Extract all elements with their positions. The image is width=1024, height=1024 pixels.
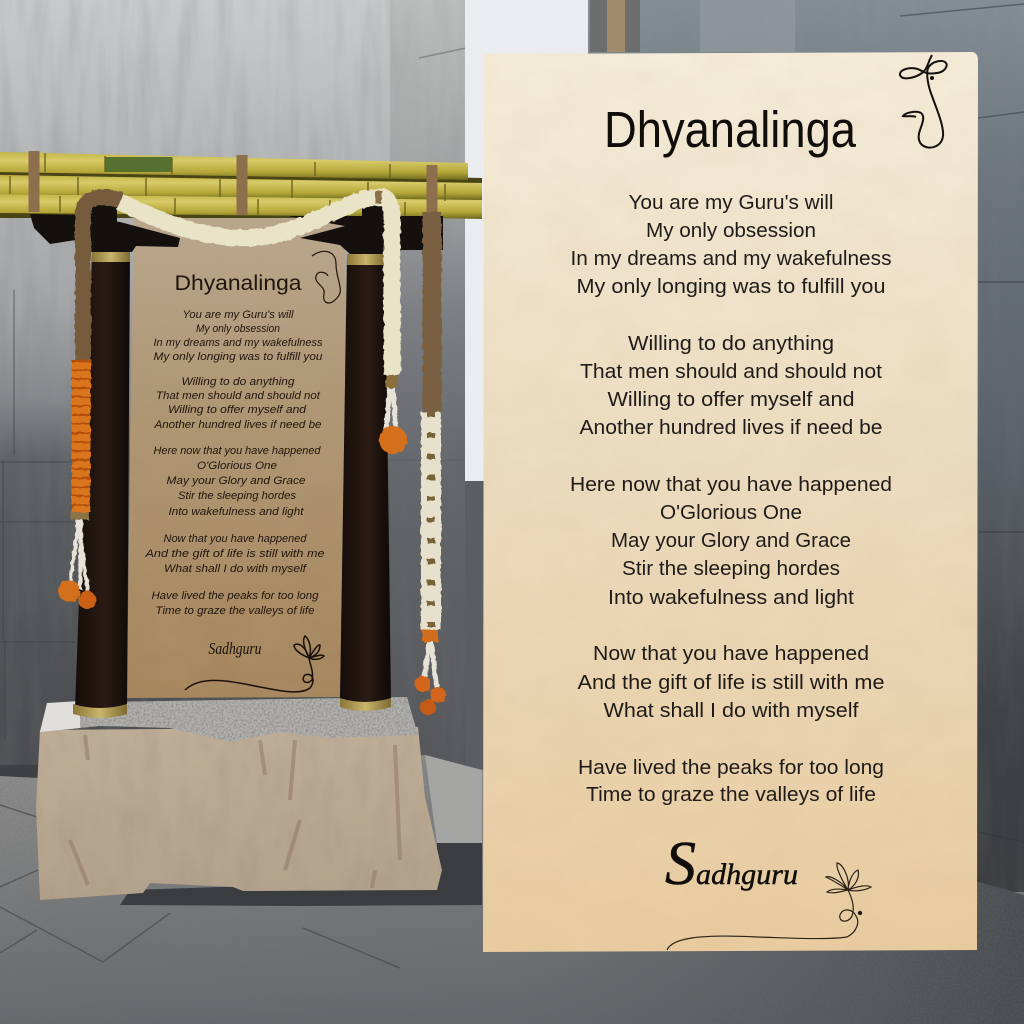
poem: Into wakefulness and light <box>608 587 854 609</box>
cloth poem lines: You are my Guru's will <box>182 309 294 321</box>
garland: white swag <box>120 197 407 454</box>
cloth poem lines: Have lived the peaks for too long <box>152 590 319 602</box>
poem: You are my Guru's will <box>628 192 834 214</box>
poem: That men should and should not <box>580 361 882 383</box>
rope ties on bamboo <box>34 151 432 216</box>
cloth poem lines: May your Glory and Grace <box>166 475 306 487</box>
panel title: Dhyanalinga <box>604 101 857 158</box>
cloth title: Dhyanalinga <box>174 272 302 295</box>
right column <box>340 254 391 711</box>
poem: Here now that you have happened <box>570 474 892 496</box>
cloth banner with poem <box>127 216 345 698</box>
cloth poem lines: In my dreams and my wakefulness <box>154 337 323 349</box>
cloth poem lines: Stir the sleeping hordes <box>178 490 297 502</box>
cloth poem lines: My only longing was to fulfill you <box>154 351 322 363</box>
poem: O'Glorious One <box>660 502 802 524</box>
cloth poem lines: Willing to do anything <box>182 376 295 388</box>
poem: And the gift of life is still with me <box>578 672 884 694</box>
left column <box>73 250 130 718</box>
poem: Willing to do anything <box>628 333 834 355</box>
dark pillar base <box>465 481 485 771</box>
bamboo beams <box>0 152 482 219</box>
floor <box>0 755 1024 1024</box>
cloth poem lines <box>144 309 324 617</box>
rope above paper <box>607 0 625 52</box>
cloth poem lines: Another hundred lives if need be <box>153 419 322 431</box>
poem: Now that you have happened <box>593 643 869 665</box>
garland: left brown and orange strand <box>58 197 122 609</box>
cloth poem lines: And the gift of life is still with me <box>144 548 324 560</box>
right wall <box>588 0 1024 892</box>
signature: Sadhguru <box>665 830 798 898</box>
poem: Stir the sleeping hordes <box>622 558 840 580</box>
poem: Have lived the peaks for too long <box>578 757 884 779</box>
cloth poem lines: Now that you have happened <box>164 533 307 545</box>
cloth poem lines: Willing to offer myself and <box>168 404 307 416</box>
black capitals and brackets <box>30 197 443 254</box>
poem: My only obsession <box>646 220 816 242</box>
cloth poem lines: Here now that you have happened <box>154 445 321 457</box>
Linga Bhairavi doodle icon <box>900 55 947 148</box>
left wall <box>0 0 392 780</box>
cloth poem lines: Time to graze the valleys of life <box>156 605 314 617</box>
corner pillar <box>390 0 480 770</box>
garland: right long strand <box>415 212 446 715</box>
cloth poem lines: Into wakefulness and light <box>168 506 304 518</box>
cloth doodle <box>312 251 340 303</box>
stone plinth <box>36 697 442 900</box>
cloth lotus doodle <box>185 636 324 692</box>
poem: In my dreams and my wakefulness <box>570 248 892 270</box>
poem: My only longing was to fulfill you <box>576 276 886 298</box>
cloth signature: Sadhguru <box>208 639 262 658</box>
parchment panel <box>483 52 978 952</box>
lotus doodle with trailing line <box>667 863 871 950</box>
cloth poem lines: O'Glorious One <box>197 460 277 472</box>
white column <box>465 0 589 481</box>
plinth top face <box>40 697 418 742</box>
plinth front face <box>36 727 442 900</box>
poem: May your Glory and Grace <box>611 530 851 552</box>
poem: What shall I do with myself <box>604 700 859 722</box>
poem <box>570 192 892 806</box>
poem: Another hundred lives if need be <box>580 417 882 439</box>
poem: Willing to offer myself and <box>608 389 854 411</box>
cloth poem lines: That men should and should not <box>156 390 321 402</box>
cloth poem lines: What shall I do with myself <box>164 563 307 575</box>
cloth poem lines: My only obsession <box>196 323 280 335</box>
poem: Time to graze the valleys of life <box>586 784 876 806</box>
